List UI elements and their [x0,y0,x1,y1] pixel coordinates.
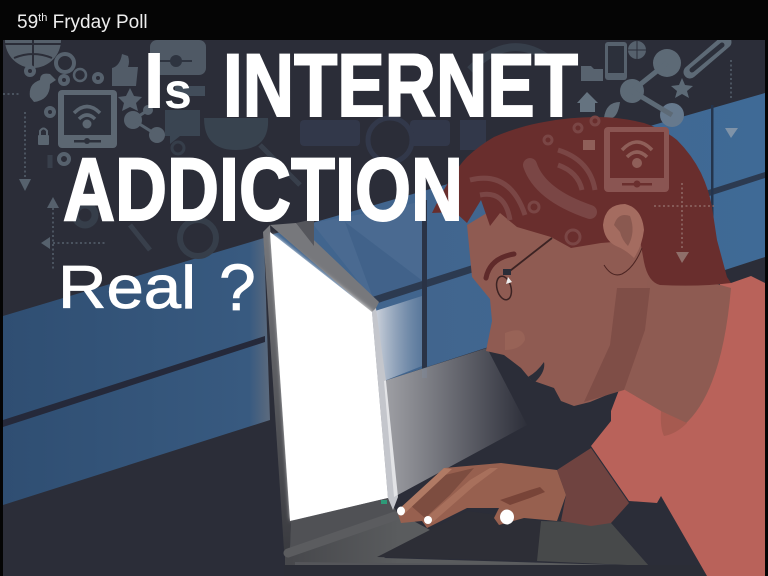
icon: smartphone right [605,42,627,80]
icon: phone landscape [150,40,206,75]
screen glow [272,234,388,520]
dotted guide lines left [3,60,731,270]
light beam [384,348,527,497]
face [467,205,650,406]
ear lobe outline [604,248,642,275]
fingernails [397,506,514,524]
icon: large circle tile [204,118,268,150]
second finger highlight [426,468,498,522]
icon: middle tile row [300,118,486,162]
knuckle shade [500,487,545,505]
icon: bird [30,74,56,102]
icon: star [118,88,142,111]
icon: chain right [690,42,725,72]
icon: small globe [628,41,646,59]
word: Is: s [164,63,192,119]
icon: small gears in hair [529,117,599,244]
icon: chain inner [692,45,722,70]
top bar [0,0,768,40]
lit screen [270,232,388,521]
icon: house [577,92,598,112]
icon: tablet in hair [604,127,669,192]
poll label: Fryday Poll [47,12,148,33]
right bezel [372,308,398,510]
neck [600,262,731,435]
front strip [295,562,654,568]
ear inner [614,215,633,246]
icon: signal arcs in hair [470,150,595,220]
word: Real? [58,250,256,324]
icon: chat dashes [175,86,205,96]
word: INTERNET: INTERNET [223,35,578,135]
icon: share nodes [124,105,165,143]
poll label: th [38,12,47,24]
lower bezel [290,498,397,548]
hand [397,463,566,528]
nostril [505,330,525,350]
hair [432,117,731,286]
power light [381,500,387,504]
top bezel shade [296,219,314,246]
icon: chat bubble [165,110,200,144]
left bezel [263,225,291,550]
word: Real?: ? [219,250,256,324]
word: Is: I [143,36,165,125]
icon: lock [38,128,49,145]
trackpad dark [377,511,541,561]
jaw shadow [584,288,650,402]
arrowheads [19,128,738,249]
finger highlight [397,468,452,514]
title [58,35,578,324]
icon: lock in hair [583,140,595,150]
icon: globe [5,12,61,68]
collar fold [661,411,687,436]
icon: wifi tablet [58,90,117,148]
ear [603,204,644,258]
icon: bird right [604,102,620,118]
laptop base [285,512,649,576]
trackpad light [537,521,649,566]
word: Real?: Real [58,254,196,321]
icon: folder [581,66,603,81]
bottom shadow [284,565,707,576]
finger shade [410,468,474,518]
man [397,117,765,576]
eyebrow [486,254,514,278]
mouth [528,362,544,383]
icon: gears and at sign [26,54,102,164]
top bezel strip [270,223,379,314]
word: ADDICTION: ADDICTION [63,139,463,239]
arrowhead in hair [676,252,689,263]
laptop [263,219,707,576]
shirt [591,276,765,576]
icon: gear lower [75,142,216,256]
background app icons [3,12,738,270]
icon: thumb up [112,54,138,86]
icon: link chain [50,145,300,250]
forearm [557,448,629,526]
glasses [494,238,552,301]
dotted lines in hair [654,183,714,250]
hinge [288,516,395,553]
icon: star right [671,78,693,98]
window panels [3,93,765,505]
icon: share right [620,49,684,127]
icon: phone handset in hair [530,165,590,212]
icon: top arcs [470,47,550,70]
poll label: 59 [17,12,38,33]
